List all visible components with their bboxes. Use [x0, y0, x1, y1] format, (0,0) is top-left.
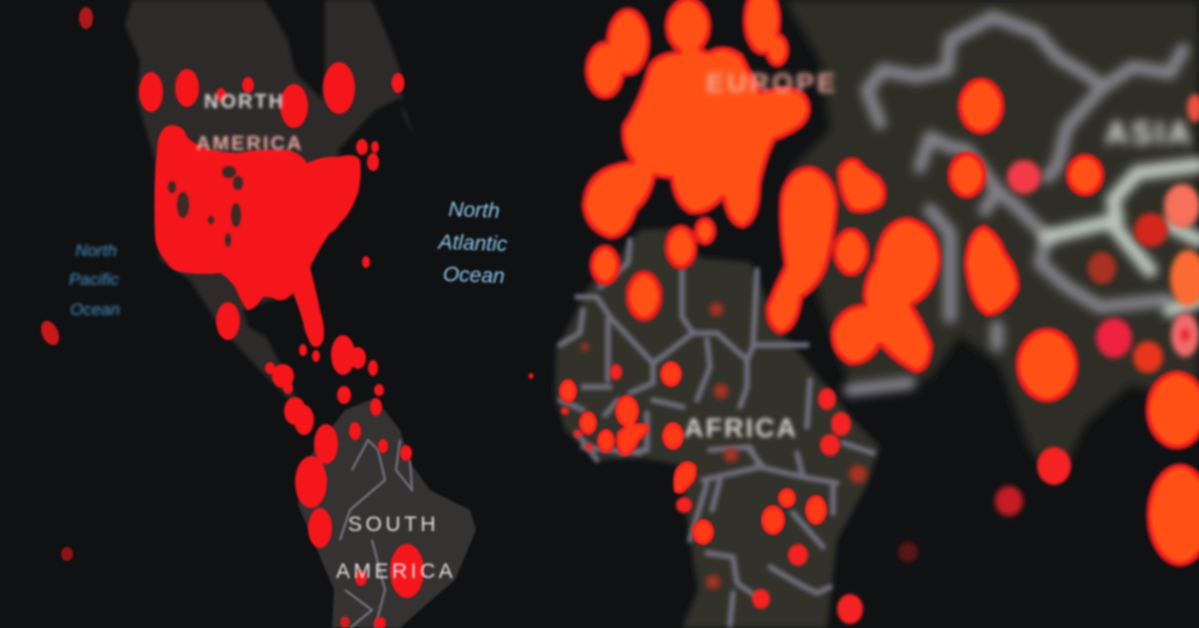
ocean label: North Atlantic Ocean: North [448, 198, 500, 223]
continent label: North America [196, 91, 303, 155]
continent label: Europe: EUROPE [706, 68, 838, 98]
land: South America [298, 398, 476, 628]
marker core: African orange fill [559, 361, 827, 545]
continent label: South America: SOUTH [348, 513, 439, 536]
ocean label: North Pacific Ocean [69, 241, 120, 319]
marker halo: red outline [583, 0, 1199, 565]
continent label: North America: AMERICA [196, 133, 303, 155]
continent label: South America: AMERICA [336, 560, 456, 583]
ocean label: North Atlantic Ocean: Ocean [442, 263, 505, 288]
continent label: Africa: AFRICA [684, 413, 798, 443]
hot spots: Africa markers with orange centres [559, 361, 827, 545]
marker cluster: United States [154, 125, 361, 346]
ocean label: North Pacific Ocean: Pacific [69, 270, 120, 289]
hot spots: soft markers over eastern Asia [1007, 94, 1199, 373]
hot spots: orange-centred markers across Europe and Asia [583, 0, 1199, 565]
marker row: Canada [139, 72, 163, 112]
borders: bright eastern Asia glow [1047, 165, 1199, 310]
map gaps: land showing through the United States cluster [168, 166, 243, 247]
borders: Africa [560, 240, 873, 625]
continent label: Asia: ASIA [1105, 115, 1193, 151]
hot spots: red markers across the Americas [37, 7, 534, 628]
ocean label: North Atlantic Ocean [435, 198, 509, 288]
land: Eurasia [785, 0, 1199, 478]
hot spots: faint dim markers [581, 252, 1116, 589]
continent label: South America [336, 513, 456, 583]
ocean label: North Pacific Ocean: North [75, 241, 117, 260]
land: North America [125, 0, 416, 412]
borders: Asia [850, 17, 1183, 390]
continent label: North America: NORTH [204, 91, 285, 113]
marker halo: African red outline [559, 361, 827, 545]
marker core: orange fill [583, 0, 1199, 565]
land: Africa [555, 228, 880, 628]
marker cluster: Caribbean and Central America [299, 344, 307, 356]
ocean label: North Atlantic Ocean: Atlantic [436, 231, 508, 256]
marker cluster: South America [314, 424, 338, 464]
hot spots: small African markers [561, 364, 1071, 624]
ocean label: North Pacific Ocean: Ocean [70, 300, 120, 319]
